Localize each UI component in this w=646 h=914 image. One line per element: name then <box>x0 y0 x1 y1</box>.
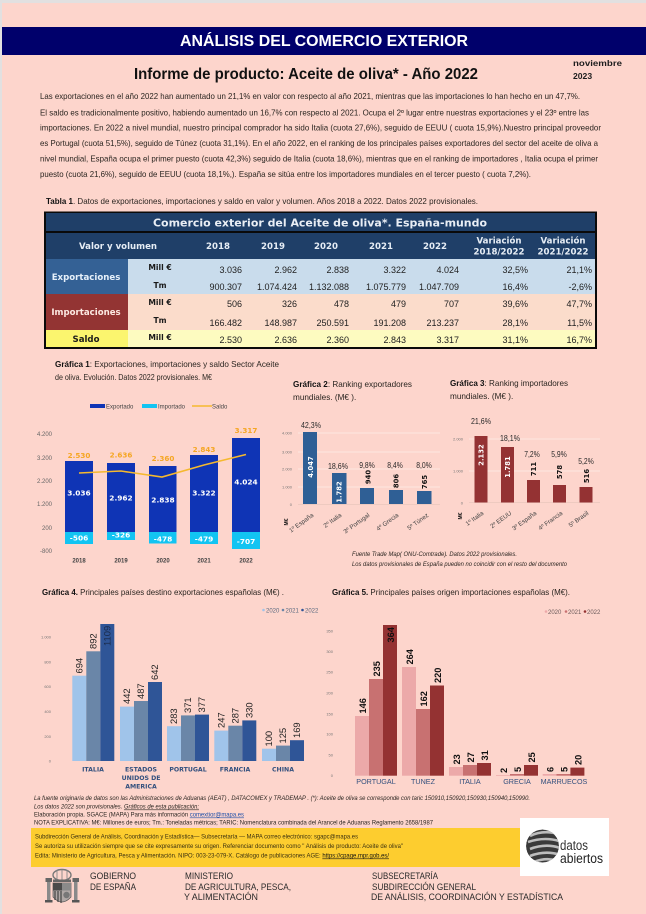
chart 5: import origins: 5 <box>560 767 570 772</box>
data table: 47,7% <box>566 299 592 309</box>
chart 4: export destinations: 330 <box>244 702 254 718</box>
chart 1: exports, imports and balance: -478 <box>154 534 172 544</box>
chart 2: world exporters ranking: M€ <box>284 518 290 525</box>
chart 5: import origins: TUNEZ <box>411 777 436 786</box>
data table: 16,7% <box>566 335 592 345</box>
chart 3: world importers ranking: 18,1% <box>500 433 520 443</box>
chart 1: exports, imports and balance: -800 <box>40 549 53 555</box>
department name: SUBDIRECCIÓN GENERAL <box>372 881 476 892</box>
intro text <box>40 92 601 179</box>
chart 5: import origins: 300 <box>326 649 334 654</box>
chart 4: export destinations: 1.000 <box>41 634 52 640</box>
intro text: El saldo es tradicionalmente positivo, habiendo aumentado un 16,7% con respecto al 2021. Ocupa el 2º lugar entre nuestras exportaciones y el 23º entre las <box>40 108 589 118</box>
ministry name <box>184 870 291 902</box>
data table: 707 <box>444 299 459 309</box>
intro text: puesto (cuota 21,6%), seguido de EEUU (cuota 18,1%,). España se sitúa entre los importadores mundiales en el tercer puesto ( cuota 7,2%). <box>40 170 531 179</box>
chart 5: import origins: 23 <box>452 754 462 764</box>
chart 2: world exporters ranking: 5º Túnez <box>406 512 430 532</box>
chart 2: world exporters ranking: 3º Portugal <box>342 512 371 536</box>
chart 1: exports, imports and balance: -326 <box>112 530 130 540</box>
chart 5 legend: 2020 <box>548 610 562 616</box>
data table: 2.530 <box>219 335 242 345</box>
chart 1: exports, imports and balance: 3.322 <box>192 488 216 498</box>
chart 1: exports, imports and balance: 200 <box>42 526 53 532</box>
data table: 2.636 <box>274 335 297 345</box>
chart 2-3 source note <box>352 552 568 568</box>
chart 4: export destinations: FRANCIA <box>220 766 251 774</box>
date: 2023 <box>573 71 592 81</box>
chart 1: exports, imports and balance: 2020 <box>156 558 170 564</box>
data table: 4.024 <box>436 265 459 275</box>
source notes: NOTA EXPLICATIVA: M€: Millones de euros; Tm.: Toneladas métricas; TARIC: Nomenclatura combinada del Arancel de Aduanas Reglamento 2658/1987 <box>34 820 434 826</box>
chart 5: import origins: 6 <box>546 767 556 772</box>
source notes: Los datos 2022 son provisionales. Gráficos de esta publicación: <box>34 804 199 810</box>
department name: SUBSECRETARÍA <box>372 870 439 881</box>
chart 5: import origins: 350 <box>326 628 334 634</box>
chart 4 legend <box>262 608 319 614</box>
data table: 3.317 <box>436 335 459 345</box>
government name: GOBIERNO <box>90 870 136 881</box>
chart 5: import origins: 235 <box>372 661 382 676</box>
chart 2: world exporters ranking: 8,4% <box>387 460 403 470</box>
chart 3: world importers ranking: 0 <box>461 500 464 506</box>
chart 2: world exporters ranking: 42,3% <box>301 420 321 430</box>
data table <box>44 212 597 349</box>
intro text: es Portugal (cuota 51,5%), seguido de Túnez (cuota 31,1%). En el año 2022, en el ranking de los principales países exportadores del sector del aceite de oliva a <box>40 139 598 148</box>
chart 4: export destinations: 600 <box>44 684 52 689</box>
chart 4: export destinations: ESTADOS <box>125 766 157 774</box>
chart 1: exports, imports and balance: 4.024 <box>234 478 258 486</box>
chart 4: export destinations: 100 <box>263 731 274 746</box>
chart 1 heading: Gráfica 1: Exportaciones, importaciones y saldo Sector Aceite <box>55 360 279 369</box>
chart 3: world importers ranking: 5,2% <box>578 456 594 466</box>
chart 4: export destinations: UNIDOS DE <box>122 775 160 782</box>
chart 4 legend: 2020 <box>266 608 280 614</box>
data table: 2.843 <box>383 335 406 345</box>
date: noviembre <box>573 58 622 68</box>
report title: Informe de producto: Aceite de oliva* - Año 2022 <box>134 66 478 83</box>
chart 1 legend: Exportado <box>106 404 134 410</box>
data table: 2.962 <box>274 265 297 275</box>
data table: 3.036 <box>219 265 242 275</box>
chart 3: world importers ranking: 3º España <box>511 510 539 532</box>
chart 4: export destinations: 371 <box>182 697 193 713</box>
chart 4: export destinations: 247 <box>216 712 226 728</box>
chart 1: exports, imports and balance: 2.360 <box>152 454 174 463</box>
chart 2: world exporters ranking: 0 <box>290 502 293 507</box>
chart 5: import origins: 146 <box>358 698 368 714</box>
chart 5 legend <box>545 610 601 616</box>
data table: Mill € <box>148 263 172 272</box>
data table: 479 <box>391 299 406 309</box>
chart 3: world importers ranking: 711 <box>530 462 538 476</box>
data table: 478 <box>334 299 349 309</box>
department name: DE ANÁLISIS, COORDINACIÓN Y ESTADÍSTICA <box>371 891 564 902</box>
data table: 250.591 <box>316 318 349 328</box>
contact box: Subdirección General de Análisis, Coordinación y Estadística— Subsecretaría — MAPA correo electrónico: sgapc@mapa.es <box>35 834 358 840</box>
chart 2-3 source note: Los datos provisionales de España pueden no coincidir con el resto del documento <box>352 562 568 568</box>
data table: 148.987 <box>264 318 297 328</box>
data table: 2020 <box>314 242 338 252</box>
chart 2: world exporters ranking: 3.000 <box>282 450 293 454</box>
data table: Variación <box>540 236 586 246</box>
chart 2: world exporters ranking: 4º Grecia <box>375 512 401 533</box>
datos abiertos logo: abiertos <box>560 851 603 866</box>
data table: 2.360 <box>326 335 349 345</box>
export bars <box>65 438 260 532</box>
chart 5: import origins: 264 <box>405 648 415 664</box>
contact box: Edita: Ministerio de Agricultura, Pesca y Alimentación. NIPO: 003-23-079-X. Catálogo de publicaciones AGE: https://cpage.mpr.gob.es/ <box>35 854 389 860</box>
data table: Valor y volumen <box>79 242 157 252</box>
data table: 1.047.709 <box>419 282 459 292</box>
data table: 39,6% <box>502 299 528 309</box>
chart 2: world exporters ranking: 765 <box>421 475 429 489</box>
chart 4: export destinations: 287 <box>230 708 240 724</box>
chart 3: world importers ranking: 5º Brasil <box>568 510 590 529</box>
icon: coat of arms of Spain <box>45 870 80 903</box>
chart 3 heading: Gráfica 3: Ranking importadores <box>450 379 568 388</box>
chart 5: import origins: PORTUGAL <box>356 777 396 786</box>
government name: DE ESPAÑA <box>90 881 137 892</box>
chart 2: world exporters ranking: 4.000 <box>282 430 293 436</box>
balance line <box>79 454 246 477</box>
data table: 1.075.779 <box>366 282 406 292</box>
chart 2: world exporters ranking: 2º Italia <box>322 512 344 530</box>
chart 4: export destinations: PORTUGAL <box>169 766 207 774</box>
chart 2 heading: mundiales. (M€ ). <box>293 393 356 402</box>
data table: 21,1% <box>566 265 592 275</box>
chart 1: exports, imports and balance: 2.838 <box>151 496 175 504</box>
chart 4: export destinations: 442 <box>121 688 132 704</box>
contact box: Se autoriza su utilización siempre que se cite expresamente su origen. Referenciar documento como " Análisis de producto: Aceite de oliva" <box>35 844 403 850</box>
data table: 2018/2022 <box>474 248 525 258</box>
chart 4: export destinations: ITALIA <box>82 766 104 774</box>
data table: 2021/2022 <box>538 248 589 258</box>
data table: 213.237 <box>426 318 459 328</box>
data table: Exportaciones <box>52 273 120 283</box>
chart 5: import origins: 20 <box>573 755 583 765</box>
chart 1: exports, imports and balance: 2.200 <box>37 479 53 485</box>
chart 1: exports, imports and balance: 2018 <box>72 558 86 564</box>
data table: 191.208 <box>373 318 406 328</box>
chart 2: world exporters ranking: 2.000 <box>282 466 293 472</box>
chart 5 legend: 2022 <box>587 610 601 616</box>
data table: Mill € <box>148 298 172 307</box>
chart 1: exports, imports and balance: 2022 <box>239 558 253 564</box>
chart 5: import origins: 25 <box>527 752 537 762</box>
chart 3 heading <box>450 379 568 401</box>
chart 1: exports, imports and balance: 4.200 <box>37 432 53 438</box>
data table: Tm <box>153 281 167 290</box>
chart 1: exports, imports and balance: 2019 <box>114 558 128 564</box>
chart 2: world exporters ranking: 1.000 <box>282 484 293 490</box>
datos abiertos logo: datos <box>560 838 588 853</box>
chart 2: world exporters ranking: 4.047 <box>307 456 315 478</box>
chart 1 heading: de oliva. Evolución. Datos 2022 provisionales. M€ <box>55 373 212 382</box>
chart 3: world importers ranking <box>453 416 600 532</box>
chart 3: world importers ranking: 2º EEUU <box>489 510 513 530</box>
chart 4: export destinations: 0 <box>49 758 52 764</box>
contact box <box>31 828 521 867</box>
chart 5: import origins: 162 <box>419 691 429 706</box>
ministry name: DE AGRICULTURA, PESCA, <box>185 881 291 892</box>
chart 3: world importers ranking: 1º Italia <box>464 510 486 528</box>
chart 5: import origins: 364 <box>386 626 396 642</box>
chart 1: exports, imports and balance: 3.036 <box>67 488 91 498</box>
chart 1: exports, imports and balance: -506 <box>70 534 88 542</box>
chart 2-3 source note: Fuente Trade Map( ONU-Comtrade). Datos 2022 provisionales. <box>352 552 517 558</box>
chart 3: world importers ranking: 578 <box>556 465 564 479</box>
chart 5: import origins: 50 <box>329 752 334 758</box>
chart 1: exports, imports and balance: 3.317 <box>235 426 257 435</box>
chart 2: world exporters ranking <box>282 420 440 536</box>
chart 1 legend: Importado <box>158 404 186 410</box>
data table: Variación <box>476 236 522 246</box>
source notes: La fuente originaria de datos son las Administraciones de Aduanas (AEAT) , DATACOMEX y TRADEMAP . (*): Aceite de oliva se corresponde con taric 150910,150920,150930,150940,150990. <box>34 796 530 802</box>
chart 1: exports, imports and balance: 2.530 <box>68 451 90 460</box>
data table: 31,1% <box>502 335 528 345</box>
data table: Mill € <box>148 333 172 342</box>
data table: 326 <box>282 299 297 309</box>
ministry name: Y ALIMENTACIÓN <box>184 891 258 902</box>
chart 1: exports, imports and balance: 2.636 <box>110 450 132 460</box>
chart 5: import origins: 150 <box>326 712 334 716</box>
chart 4 legend: 2021 <box>286 608 300 614</box>
data table: Comercio exterior del Aceite de oliva*. España-mundo <box>153 218 487 230</box>
chart 5: import origins: 250 <box>326 670 334 674</box>
chart 5 heading: Gráfica 5. Principales países origen importaciones españolas (M€). <box>332 588 570 597</box>
ministry name: MINISTERIO <box>185 870 233 881</box>
header banner: ANÁLISIS DEL COMERCIO EXTERIOR <box>180 33 468 50</box>
chart 4: export destinations: 377 <box>196 697 207 712</box>
data table: Saldo <box>72 335 100 345</box>
data table: 506 <box>227 299 242 309</box>
data table: 3.322 <box>383 265 406 275</box>
chart 4: export destinations: 125 <box>277 728 288 744</box>
source notes: Elaboración propia. SGACE (MAPA) Para más información comextior@mapa.es <box>34 812 244 818</box>
data table: 28,1% <box>502 318 528 328</box>
data table: 2022 <box>423 242 447 252</box>
header banner <box>2 27 646 55</box>
chart 2 heading <box>293 380 412 402</box>
chart 2: world exporters ranking: 940 <box>364 470 372 484</box>
chart 3: world importers ranking: 4º Francia <box>537 510 565 532</box>
chart 4: export destinations: CHINA <box>272 766 294 774</box>
chart 4: export destinations: 800 <box>44 660 52 664</box>
government name <box>90 870 137 892</box>
datos abiertos logo <box>520 818 609 876</box>
chart 5: import origins: MARRUECOS <box>541 777 588 786</box>
chart 4: export destinations: 892 <box>88 633 98 649</box>
chart 4 heading: Gráfica 4. Principales países destino exportaciones españolas (M€) . <box>42 588 284 597</box>
chart 4: export destinations: AMERICA <box>125 784 157 790</box>
chart 4: export destinations: 694 <box>74 658 84 674</box>
chart 1: exports, imports and balance: 1.200 <box>37 502 53 508</box>
import bars <box>65 532 260 549</box>
chart 4: export destinations: 642 <box>149 664 160 680</box>
chart 2: world exporters ranking: 1º España <box>288 512 316 534</box>
chart 1: exports, imports and balance: 3.200 <box>37 456 53 462</box>
chart 5: import origins: GRECIA <box>503 777 531 786</box>
chart 5: import origins: 200 <box>326 690 334 696</box>
chart 4: export destinations: 169 <box>291 722 302 738</box>
chart 5: import origins <box>326 610 601 786</box>
chart 1: exports, imports and balance <box>37 404 260 564</box>
data table: 32,5% <box>502 265 528 275</box>
intro text: nivel mundial, España ocupa el primer puesto (cuota 42,3%) seguido de Italia (cuota 18,6%), mientras que en el ranking de importadores , Italia ocupa el primer <box>40 154 598 164</box>
chart 3: world importers ranking: 21,6% <box>471 416 491 426</box>
chart 1: exports, imports and balance: 2.843 <box>193 445 215 454</box>
chart 2: world exporters ranking: 806 <box>392 474 400 488</box>
chart 1 legend: Saldo <box>212 404 228 410</box>
chart 1 legend <box>90 404 228 410</box>
chart 1: exports, imports and balance: -707 <box>237 537 255 546</box>
chart 4: export destinations: 200 <box>44 734 52 739</box>
chart 1: exports, imports and balance: 2021 <box>197 558 211 564</box>
chart 3: world importers ranking: 1.781 <box>504 456 512 478</box>
intro text: importaciones. En 2022 a nivel mundial, nuestro principal comprador ha sido Italia (cuota 27,6%), seguido de EEUU ( cuota 15,9%).Nuestro principal proveedor <box>40 124 601 132</box>
chart 2: world exporters ranking: 18,6% <box>328 461 348 471</box>
chart 1: exports, imports and balance: -479 <box>195 534 213 544</box>
intro text: Las exportaciones en el año 2022 han aumentado un 21,1% en valor con respecto al año 2021, mientras que las importaciones lo han hecho en un 47,7%. <box>40 92 580 101</box>
data table: -2,6% <box>568 282 592 292</box>
chart 5: import origins: 0 <box>331 773 334 778</box>
chart 3: world importers ranking: M€ <box>458 512 464 519</box>
chart 5: import origins: ITALIA <box>459 777 481 786</box>
chart 4: export destinations <box>41 608 319 790</box>
chart 5: import origins: 31 <box>480 750 490 760</box>
date <box>573 58 622 81</box>
chart 1 heading <box>55 360 279 382</box>
chart 3: world importers ranking: 516 <box>583 469 591 483</box>
data table: 11,5% <box>567 318 592 328</box>
chart 2: world exporters ranking: 8,0% <box>416 460 432 470</box>
chart 5: import origins: 100 <box>326 732 334 736</box>
data table: 166.482 <box>209 318 242 328</box>
chart 5: import origins: 220 <box>433 668 443 683</box>
chart 3: world importers ranking: 7,2% <box>524 449 540 459</box>
chart 5: import origins: 2 <box>499 768 509 773</box>
data table: 1.074.424 <box>257 282 297 292</box>
chart 2: world exporters ranking: 9,8% <box>359 460 375 470</box>
chart 4: export destinations: 1109 <box>102 626 112 646</box>
chart 3: world importers ranking: 2.132 <box>478 444 486 466</box>
data table: 2018 <box>206 242 230 252</box>
chart 3 heading: mundiales. (M€ ). <box>450 392 513 401</box>
data table: 2.838 <box>326 265 349 275</box>
chart 3: world importers ranking: 2.000 <box>453 436 464 442</box>
source notes <box>34 796 530 826</box>
chart 3: world importers ranking: 1.000 <box>453 468 464 474</box>
department name <box>371 870 564 902</box>
data table: 1.132.088 <box>309 282 349 292</box>
chart 5 legend: 2021 <box>568 610 582 616</box>
data table: 900.307 <box>209 282 242 292</box>
chart 4: export destinations: 400 <box>44 709 52 714</box>
data table: 2021 <box>369 242 393 252</box>
chart 2: world exporters ranking: 1.782 <box>336 481 344 503</box>
data table: Importaciones <box>51 308 121 318</box>
chart 4: export destinations: 283 <box>168 708 179 724</box>
table caption: Tabla 1. Datos de exportaciones, importaciones y saldo en valor y volumen. Años 2018 a 2022. Datos 2022 provisionales. <box>46 197 478 206</box>
chart 4: export destinations: 487 <box>135 683 146 699</box>
data table: 2019 <box>261 242 285 252</box>
chart 3: world importers ranking: 5,9% <box>551 449 567 459</box>
chart 1: exports, imports and balance: 2.962 <box>109 494 133 502</box>
icon: striped globe <box>526 830 562 862</box>
data table: Tm <box>153 316 167 325</box>
data table: 16,4% <box>502 282 528 292</box>
chart 5: import origins: 5 <box>513 767 523 772</box>
chart 4 legend: 2022 <box>305 608 319 614</box>
chart 5: import origins: 27 <box>466 752 476 762</box>
chart 2 heading: Gráfica 2: Ranking exportadores <box>293 380 412 389</box>
